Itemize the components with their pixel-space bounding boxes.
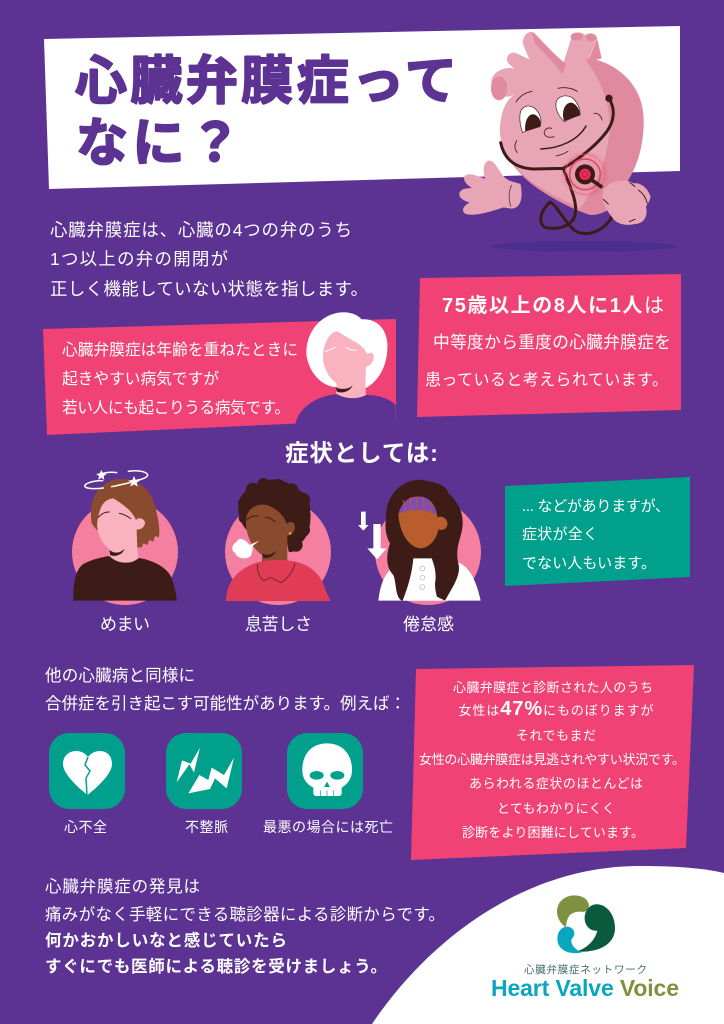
- callout: no symptoms: [505, 477, 690, 586]
- closing text: 何かおかしいなと感じていたら: [45, 930, 287, 950]
- title banner: 心臓弁膜症って: [75, 53, 457, 111]
- heading: symptoms: 症状としては:: [285, 440, 438, 466]
- symptom: dizziness: めまい: [100, 615, 150, 634]
- logo mark: [557, 895, 615, 953]
- callout: no symptoms: でない人もいます。: [522, 555, 656, 572]
- icon: arrhythmia: 不整脈: [185, 819, 228, 835]
- callout: women statistic: あらわれる症状のほとんどは: [469, 776, 643, 791]
- closing text: 心臓弁膜症の発見は: [45, 877, 200, 896]
- icon: heart failure: 心不全: [64, 819, 107, 835]
- hand: right fist: [602, 181, 651, 225]
- intro text: [50, 220, 368, 299]
- logo panel: Heart Valve Voice: [491, 975, 679, 1001]
- title banner: なに？: [76, 115, 241, 173]
- logo panel: [372, 866, 724, 1024]
- intro text: 正しく機能していない状態を指します。: [50, 279, 368, 299]
- closing text: [45, 877, 445, 976]
- illustration: heart character with stethoscope: [461, 32, 678, 252]
- callout: no symptoms: 症状が全く: [522, 526, 598, 543]
- eyes: [520, 96, 580, 133]
- icon: arrhythmia: [166, 733, 242, 835]
- callout: no symptoms: ... などがありますが、: [522, 498, 670, 515]
- callout: women statistic: 女性の心臓弁膜症は見逃されやすい状況です。: [419, 752, 685, 767]
- intro text: 1つ以上の弁の開閉が: [50, 249, 228, 269]
- closing text: 痛みがなく手軽にできる聴診器による診断からです。: [45, 905, 445, 924]
- symptom: fatigue: 倦怠感: [403, 615, 454, 634]
- callout: age: 起きやすい病気ですが: [62, 370, 219, 388]
- callout: women statistic: 診断をより困難にしています。: [462, 825, 644, 840]
- icon: death: [263, 733, 393, 835]
- closing text: すぐにでも医師による聴診を受けましょう。: [45, 957, 387, 976]
- callout: age: 心臓弁膜症は年齢を重ねたときに: [62, 341, 298, 359]
- callout: women statistic: 女性は47%にものぼりますが: [458, 698, 654, 720]
- symptom: shortness of breath: [225, 478, 331, 634]
- callout: prevalence: [417, 274, 681, 417]
- callout: women statistic: それでもまだ: [516, 728, 596, 743]
- callout: women statistic: 心臓弁膜症と診断された人のうち: [453, 680, 653, 695]
- complications text: [45, 666, 406, 713]
- icon: heart failure: [49, 733, 125, 835]
- hand: left: [461, 162, 520, 213]
- illustration: older person: [295, 312, 396, 440]
- symptom: shortness of breath: 息苦しさ: [245, 615, 312, 634]
- callout: prevalence: 75歳以上の8人に1人は: [442, 294, 664, 317]
- complications text: 他の心臓病と同様に: [45, 666, 195, 685]
- logo panel: 心臓弁膜症ネットワーク: [524, 963, 647, 976]
- stethoscope: [501, 95, 613, 234]
- callout: women statistic: とてもわかりにくく: [497, 801, 615, 816]
- callout: prevalence: 中等度から重度の心臓弁膜症を: [433, 333, 671, 352]
- callout: age: 若い人にも起こりうる病気です。: [62, 399, 290, 417]
- symptom: fatigue: [358, 480, 481, 634]
- title banner: [44, 26, 680, 189]
- callout: women statistic: [411, 665, 694, 860]
- callout: age: [43, 312, 396, 440]
- callout: prevalence: 患っていると考えられています。: [425, 371, 668, 389]
- complications text: 合併症を引き起こす可能性があります。例えば：: [45, 694, 406, 713]
- icon: death: 最悪の場合には死亡: [263, 819, 393, 835]
- intro text: 心臓弁膜症は、心臓の4つの弁のうち: [50, 220, 352, 240]
- symptom: dizziness: [72, 470, 178, 634]
